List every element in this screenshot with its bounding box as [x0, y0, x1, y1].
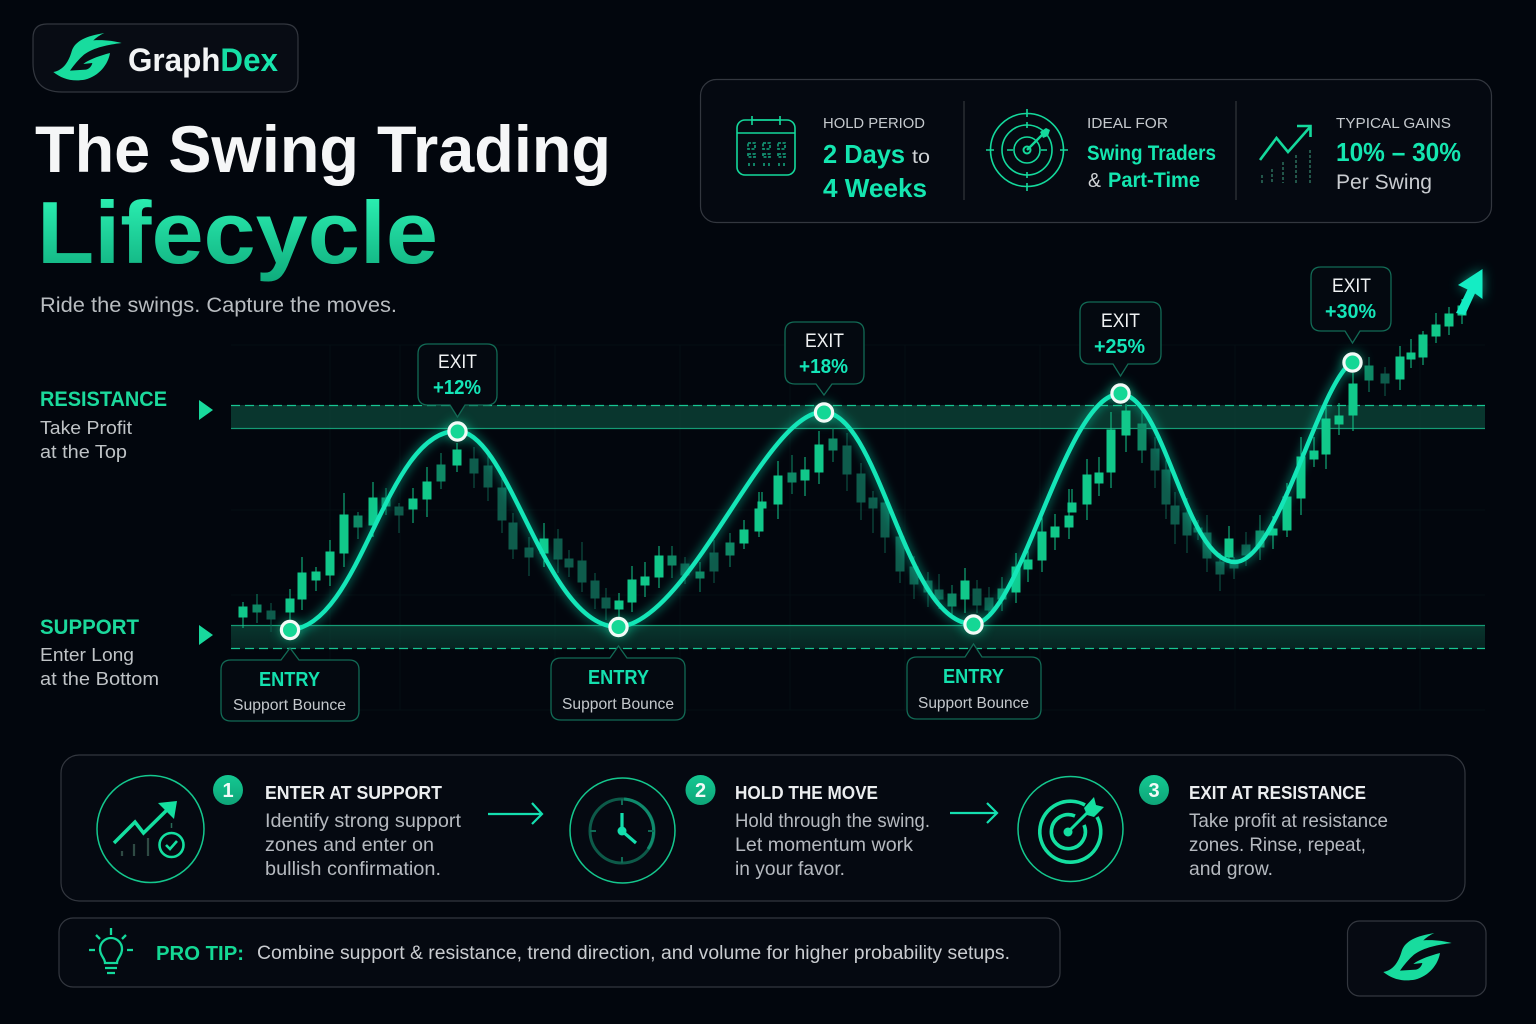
- step 3 text: EXIT AT RESISTANCE: [1189, 783, 1366, 803]
- callout: exit +18%: EXIT: [805, 331, 844, 352]
- callout: exit +12%: [418, 344, 497, 417]
- stat: typical gains: TYPICAL GAINS: [1336, 116, 1451, 132]
- icon: step 1 chart: [97, 776, 204, 882]
- icon: leaf logo small: [1383, 933, 1452, 980]
- badge: 1: 1: [222, 780, 234, 802]
- icon: leaf logo: [53, 33, 122, 80]
- stat: hold period: 2 Days: [823, 139, 905, 169]
- label: support: at the Bottom: [40, 668, 159, 689]
- callout: exit +18%: +18%: [799, 356, 848, 378]
- title: The Swing Trading: [35, 112, 611, 186]
- arrow: trend continuation: [1456, 269, 1482, 315]
- callout: entry 1: ENTRY: [259, 669, 321, 691]
- callout: entry 2: [551, 646, 685, 720]
- label: support: Enter Long: [40, 644, 134, 665]
- stat: hold period: 4 Weeks: [823, 173, 927, 203]
- callout: entry 3: Support Bounce: [918, 695, 1029, 712]
- callout: entry 3: [907, 644, 1041, 719]
- callout: exit +25%: [1080, 302, 1161, 376]
- step 1 text: zones and enter on: [265, 834, 434, 856]
- step 3 text: and grow.: [1189, 858, 1273, 880]
- support zone: [231, 625, 1485, 649]
- stat: typical gains: [1336, 116, 1461, 194]
- callout: entry 1: [221, 648, 359, 721]
- callout: exit +30%: EXIT: [1332, 276, 1371, 297]
- title: Lifecycle: [37, 183, 438, 282]
- step 1 text: ENTER AT SUPPORT: [265, 783, 442, 803]
- icon: support marker: [199, 625, 213, 645]
- pro tip text: Combine support & resistance, trend direction, and volume for higher probability setups.: [257, 943, 1010, 964]
- step 1 text: Identify strong support: [265, 810, 462, 832]
- panel: footer logo: [1348, 921, 1486, 996]
- badge: 2: 2: [695, 780, 706, 802]
- callout: exit +12%: +12%: [433, 377, 481, 399]
- stat: ideal for: &: [1088, 170, 1102, 192]
- stat: typical gains: 10% – 30%: [1336, 137, 1461, 167]
- stat: ideal for: Part-Time: [1108, 169, 1200, 192]
- callout: exit +30%: [1311, 267, 1391, 343]
- brand name: GraphDex: [128, 42, 278, 78]
- arrow: step 2 to 3: [950, 803, 997, 823]
- badge: 2: [686, 775, 716, 805]
- step 2 text: Hold through the swing.: [735, 810, 930, 832]
- callout: entry 1: Support Bounce: [233, 697, 346, 714]
- stat: ideal for: [1087, 116, 1216, 192]
- label: support: [40, 616, 159, 689]
- callout: entry 2: ENTRY: [588, 667, 650, 689]
- label: resistance: [40, 388, 167, 462]
- stat: typical gains: Per Swing: [1336, 171, 1432, 194]
- stat: ideal for: IDEAL FOR: [1087, 116, 1168, 132]
- panel: key stats: [700, 80, 1492, 222]
- icon: target with dart: [986, 109, 1068, 191]
- icon: light bulb: [89, 928, 133, 973]
- stat: hold period: [823, 116, 930, 203]
- stat: ideal for: Swing Traders: [1087, 142, 1216, 165]
- label: support: SUPPORT: [40, 616, 139, 639]
- badge: 3: [1139, 775, 1169, 805]
- step 2 text: Let momentum work: [735, 834, 913, 856]
- callout: exit +30%: +30%: [1325, 301, 1376, 323]
- label: resistance: RESISTANCE: [40, 388, 167, 411]
- callout: exit +25%: EXIT: [1101, 311, 1140, 332]
- resistance zone: [231, 405, 1485, 428]
- pro tip text: PRO TIP:: [156, 943, 244, 965]
- step 3 text: zones. Rinse, repeat,: [1189, 834, 1366, 856]
- step 3 text: Take profit at resistance: [1189, 810, 1388, 832]
- callout: exit +12%: EXIT: [438, 352, 477, 373]
- arrow: step 1 to 2: [488, 803, 542, 824]
- label: resistance: Take Profit: [40, 417, 132, 438]
- step 2 text: [735, 783, 930, 880]
- callout: entry 3: ENTRY: [943, 666, 1005, 688]
- step 1 text: [265, 783, 462, 880]
- callout: entry 2: Support Bounce: [562, 696, 674, 713]
- callout: exit +18%: [785, 322, 864, 395]
- step 2 text: HOLD THE MOVE: [735, 783, 878, 803]
- entry and exit points: [280, 352, 1362, 640]
- step 2 text: in your favor.: [735, 858, 845, 880]
- step 3 text: [1189, 783, 1388, 880]
- subtitle: Ride the swings. Capture the moves.: [40, 293, 397, 317]
- step 1 text: bullish confirmation.: [265, 858, 441, 880]
- label: resistance: at the Top: [40, 441, 127, 462]
- candlestick chart: [239, 299, 1466, 632]
- title: [35, 112, 611, 282]
- callout: exit +25%: +25%: [1094, 336, 1145, 358]
- icon: resistance marker: [199, 400, 213, 420]
- swing curve: [290, 362, 1352, 630]
- stat: hold period: HOLD PERIOD: [823, 116, 925, 132]
- icon: rising line with bars: [1260, 126, 1310, 183]
- logo badge: [33, 24, 298, 92]
- badge: 1: [213, 775, 243, 805]
- icon: step 2 clock: [570, 778, 675, 883]
- panel: pro tip: [59, 918, 1060, 987]
- panel: three steps: [61, 755, 1465, 901]
- icon: calendar: [737, 116, 795, 175]
- stat: hold period: to: [912, 147, 930, 168]
- badge: 3: 3: [1148, 780, 1160, 802]
- icon: step 3 target: [1018, 776, 1123, 882]
